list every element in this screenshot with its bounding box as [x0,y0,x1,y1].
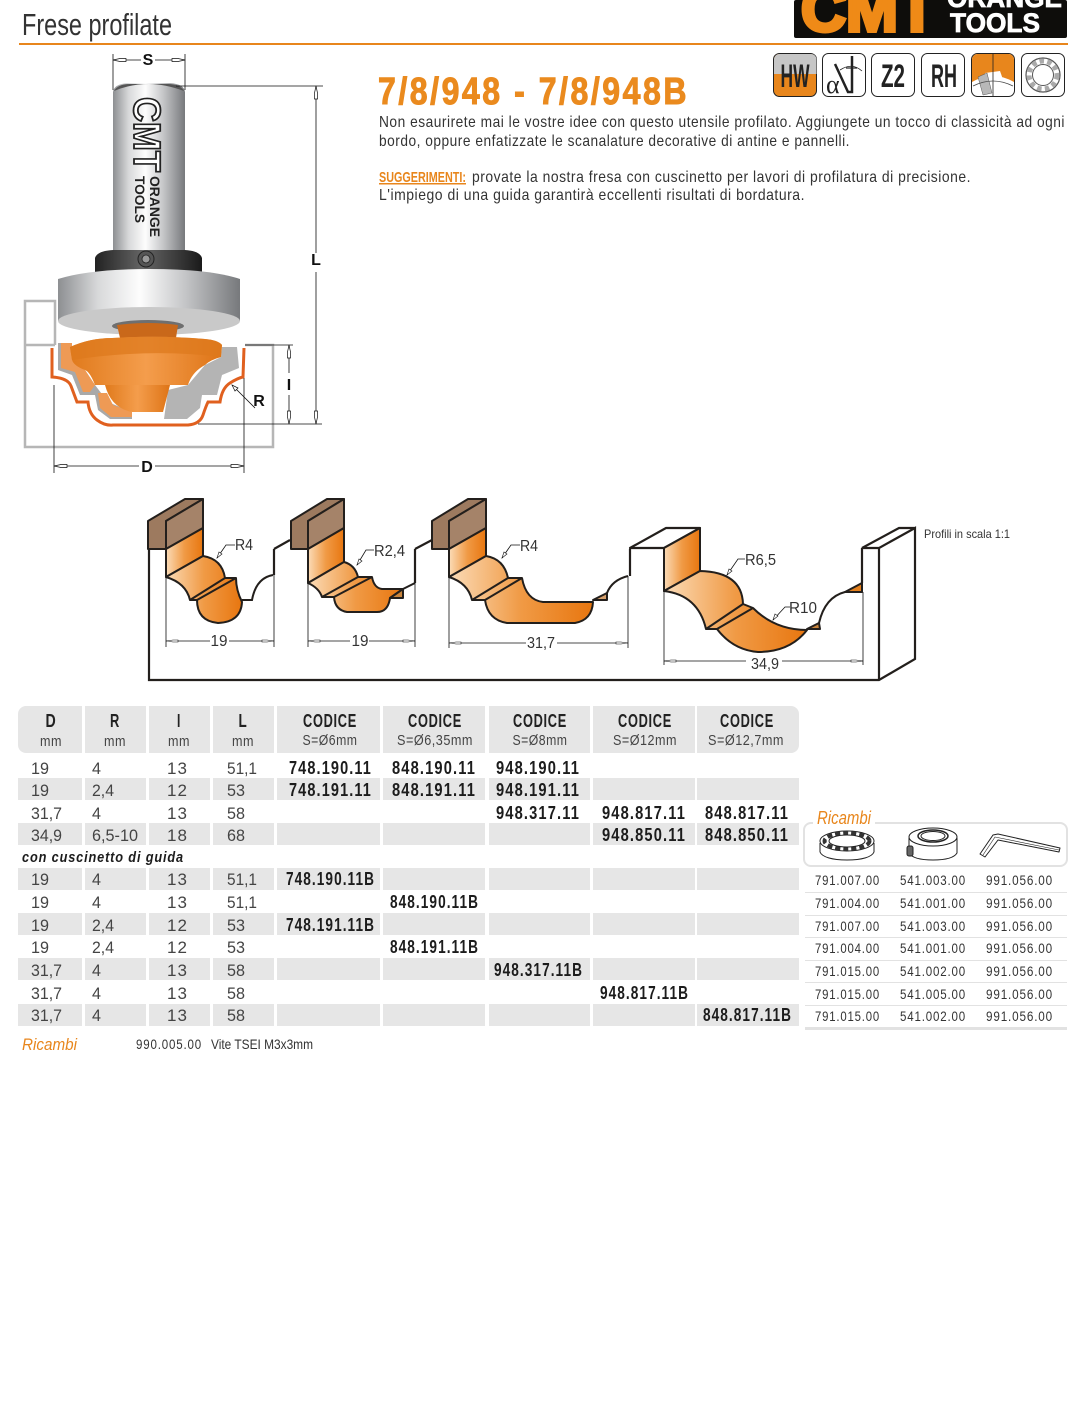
dimension columns: 6,5-10 [92,826,138,845]
code columns: 948.850.11 [602,825,686,845]
code columns: 848.190.11B [390,892,479,912]
code columns: 848.850.11 [705,825,789,845]
suggestions text: SUGGERIMENTI: [379,169,466,186]
icon: bearing part [820,831,874,860]
dimension columns: 53 [227,781,245,800]
parts codes: 791.015.00 [815,1008,880,1024]
cutter neck [117,323,180,344]
suggestions text [379,169,971,204]
profiles at 1:1 scale drawing [148,499,1010,680]
dimension columns: 13 [167,961,187,980]
code columns: 748.190.11B [286,869,375,889]
code columns [286,758,792,1025]
parts codes: 541.003.00 [900,918,966,934]
profile 4 [664,528,863,673]
parts codes: 991.056.00 [986,872,1053,888]
parts codes: 991.056.00 [986,963,1053,979]
dimension columns: 31,7 [31,984,62,1003]
table header: S=Ø6,35mm [397,732,473,749]
spare parts note: 990.005.00 [136,1036,202,1052]
profile 4: R6,5 [745,552,776,569]
icon: RH: RH [931,58,957,94]
parts codes: 791.004.00 [815,940,880,956]
profile 3: R4 [520,538,538,555]
parts codes: 541.002.00 [900,1008,966,1024]
dimension columns: 58 [227,984,245,1003]
code columns: 948.317.11 [496,803,580,823]
dimension columns: 12 [167,938,187,957]
spare parts note: Ricambi [22,1035,78,1054]
main data table [18,706,799,1026]
dimension columns: 13 [167,759,187,778]
table header: S=Ø12mm [613,732,677,749]
code columns: 848.817.11 [705,803,789,823]
icon: angle alpha [822,54,866,99]
dimension columns: 13 [167,893,187,912]
code columns: 848.817.11B [703,1005,792,1025]
dimension columns: 51,1 [227,870,257,889]
table header: CODICE [408,711,462,731]
dimension columns: 13 [167,870,187,889]
code columns: 948.817.11B [600,983,689,1003]
scale note: Profili in scala 1:1 [924,527,1010,541]
logo: CMT Orange Tools [794,0,1067,45]
parts codes: 991.056.00 [986,918,1053,934]
dimensions S, L, I, D, R: R [253,393,265,410]
parts codes: 991.056.00 [986,1008,1053,1024]
code columns: 948.817.11 [602,803,686,823]
code columns: 848.191.11 [392,780,476,800]
dimension columns: 2,4 [92,781,114,800]
parts codes: 541.001.00 [900,940,966,956]
spare parts panel [804,808,1067,1030]
table header: S=Ø8mm [512,732,568,749]
shank: ORANGE [147,176,163,237]
parts codes: 541.002.00 [900,963,966,979]
shank [113,83,185,252]
profile 1: 19 [210,633,228,650]
dimension columns: 31,7 [31,804,62,823]
dimension columns: 31,7 [31,961,62,980]
table header: CODICE [513,711,567,731]
icon: Z2 [872,54,914,96]
spare parts note: Vite TSEI M3x3mm [211,1036,313,1052]
code columns: 748.191.11B [286,915,375,935]
table header: mm [232,733,254,750]
icon: bearing [1022,54,1064,96]
table header: L [238,711,248,731]
dimension columns: 19 [31,893,49,912]
dimensions S, L, I, D, R: L [311,252,321,269]
dimension columns: 2,4 [92,916,114,935]
dimension columns: 19 [31,916,49,935]
dimension columns: 19 [31,781,49,800]
dimension columns: 58 [227,804,245,823]
dimension columns: 2,4 [92,938,114,957]
parts codes: 791.007.00 [815,918,880,934]
dimension columns: 31,7 [31,1006,62,1025]
parts codes: 791.007.00 [815,872,880,888]
dimension columns: 4 [92,1006,101,1025]
dimension columns: 4 [92,893,101,912]
dimension columns: 4 [92,759,101,778]
dimension columns: 51,1 [227,893,257,912]
icon: HW: HW [780,58,810,94]
dimension columns: 4 [92,984,101,1003]
code columns: 948.190.11 [496,758,580,778]
table header: mm [40,733,62,750]
parts codes: 791.004.00 [815,895,880,911]
profile 2: R2,4 [374,543,405,560]
dimension columns: 4 [92,961,101,980]
table header: D [46,711,56,731]
dimension columns: 58 [227,1006,245,1025]
dimensions S, L, I, D, R: D [141,459,153,476]
table header: S=Ø12,7mm [708,732,784,749]
parts heading: Ricambi [817,808,872,828]
icon: collar part [907,828,957,860]
code columns: 748.190.11 [289,758,372,778]
parts codes: 991.056.00 [986,895,1053,911]
table shading [18,706,799,1026]
stop collar [95,250,202,278]
heading: Frese profilate: Frese profilate [22,7,172,42]
subheading: con cuscinetto di guida: con cuscinetto di guida [22,849,184,866]
dimension columns: 53 [227,938,245,957]
profile 1 [148,499,274,650]
table header: S=Ø6mm [302,732,358,749]
table header: I [177,711,181,731]
icon: Z2: Z2 [881,58,905,94]
icon: RH [922,54,964,96]
profile 4: R10 [789,600,817,617]
parts codes: 791.015.00 [815,986,880,1002]
dimension columns: 19 [31,870,49,889]
spare parts note [22,1035,313,1054]
dimension columns: 12 [167,781,187,800]
cut profile line [52,348,244,425]
icon: cutting edge [972,54,1014,96]
feature icons row [774,54,1064,99]
profile 2: 19 [352,633,369,650]
shank: CMT [125,97,167,172]
table header: R [110,711,120,731]
dimension columns: 19 [31,938,49,957]
parts icon box [804,823,1067,866]
dimension columns [31,759,257,1025]
suggestions text: L'impiego di una guida garantirà eccellenti risultati di bordatura. [379,187,805,204]
profile 3 [432,499,628,652]
parts codes: 541.001.00 [900,895,966,911]
router bit technical drawing [25,52,323,476]
dimension columns: 13 [167,984,187,1003]
table header: CODICE [303,711,357,731]
dimension columns: 4 [92,804,101,823]
profile 3: 31,7 [527,635,555,652]
dimensions S, L, I, D, R: S [143,52,154,69]
dimension columns: 51,1 [227,759,257,778]
dimensions S, L, I, D, R: I [287,377,291,394]
parts codes: 991.056.00 [986,940,1053,956]
workpiece outline [25,301,273,447]
product title: 7/8/948 - 7/8/948B [378,71,689,113]
description text: bordo, oppure enfatizzate le scanalature decorative di antine e pannelli. [379,133,850,150]
dimension columns: 13 [167,1006,187,1025]
dimension columns: 4 [92,870,101,889]
profile 4: 34,9 [751,656,779,673]
suggestions text: provate la nostra fresa con cuscinetto per lavori di profilatura di precisione. [472,169,971,186]
icon: hex key [980,834,1060,857]
description text [379,114,1065,150]
code columns: 748.191.11 [289,780,372,800]
table header: mm [104,733,126,750]
icon: angle alpha: α [826,70,840,99]
code columns: 848.190.11 [392,758,476,778]
profile 1: R4 [235,537,253,554]
table header: mm [168,733,190,750]
dimension columns: 13 [167,804,187,823]
dimension columns: 34,9 [31,826,62,845]
parts codes: 541.005.00 [900,986,966,1002]
dimension columns: 12 [167,916,187,935]
cutter body [70,337,222,412]
table header: CODICE [618,711,672,731]
cross-section left [58,343,132,419]
icon: HW [774,54,816,96]
logo: CMT Orange Tools: TOOLS [950,8,1040,38]
code columns: 848.191.11B [390,937,479,957]
parts codes: 791.015.00 [815,963,880,979]
cross-section right (grey) [164,347,239,419]
code columns: 948.191.11 [496,780,580,800]
shank: TOOLS [132,176,148,223]
dimension columns: 68 [227,826,245,845]
parts codes: 541.003.00 [900,872,966,888]
profile 2 [291,499,415,650]
table header: CODICE [720,711,774,731]
dimension columns: 53 [227,916,245,935]
dimension columns: 18 [167,826,187,845]
parts codes [805,872,1067,1030]
table header [40,711,784,750]
bearing [58,269,240,335]
dimensions S, L, I, D, R [54,52,323,476]
code columns: 948.317.11B [494,960,583,980]
profile block outline [149,528,915,680]
dimension columns: 19 [31,759,49,778]
dimension columns: 58 [227,961,245,980]
parts codes: 991.056.00 [986,986,1053,1002]
